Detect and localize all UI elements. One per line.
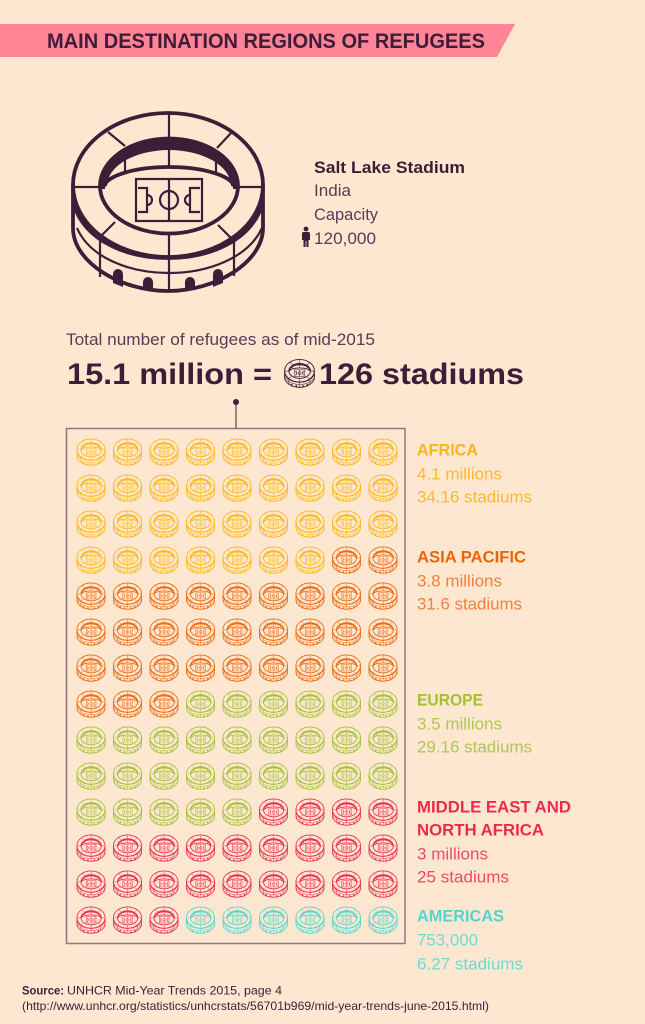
- icons: Europe: [77, 691, 397, 825]
- total headline: [67, 358, 524, 391]
- pictogram: 126 stadiums by region: [77, 439, 397, 933]
- source note: (http://www.unhcr.org/statistics/unhcrstats/56701b969/mid-year-trends-june-2015.html): [22, 999, 489, 1013]
- legend: Middle East and North Africa: [417, 798, 571, 886]
- icons: Americas: [186, 907, 397, 933]
- legend: Middle East and North Africa: MIDDLE EAST AND: [417, 798, 571, 816]
- legend: Middle East and North Africa: 3 millions: [417, 846, 488, 864]
- source note: UNHCR Mid-Year Trends 2015, page 4: [67, 984, 282, 998]
- legend: Europe: [417, 692, 532, 756]
- total headline: 126 stadiums: [319, 358, 524, 391]
- legend: Africa: 4.1 millions: [417, 466, 502, 484]
- stadium details: 120,000: [314, 230, 376, 248]
- legend: Africa: [417, 442, 532, 506]
- icons: Africa: [77, 439, 397, 573]
- legend: Europe: EUROPE: [417, 692, 483, 710]
- legend: Asia Pacific: 31.6 stadiums: [417, 596, 522, 614]
- icon: Salt Lake Stadium: [73, 113, 263, 291]
- stadium details: Capacity: [314, 206, 379, 224]
- source note: Source:: [22, 984, 64, 998]
- legend: Americas: 6.27 stadiums: [417, 956, 523, 974]
- legend: Asia Pacific: [417, 548, 526, 614]
- legend: Americas: AMERICAS: [417, 908, 504, 926]
- icons: Middle East and North Africa: [77, 799, 397, 933]
- legend: Asia Pacific: 3.8 millions: [417, 572, 502, 590]
- stadium details: Salt Lake Stadium: [314, 159, 465, 177]
- legend: Americas: 753,000: [417, 932, 478, 950]
- legend: Middle East and North Africa: 25 stadiums: [417, 868, 509, 886]
- icon: person: [302, 227, 310, 247]
- legend: Middle East and North Africa: NORTH AFRICA: [417, 822, 544, 840]
- icons: Asia Pacific: [77, 547, 397, 717]
- title banner: [0, 24, 515, 57]
- legend: Americas: [417, 908, 523, 974]
- total refugees caption: Total number of refugees as of mid-2015: [66, 331, 375, 349]
- legend: Africa: 34.16 stadiums: [417, 488, 532, 506]
- legend: Europe: 29.16 stadiums: [417, 738, 532, 756]
- legend: Asia Pacific: ASIA PACIFIC: [417, 548, 526, 566]
- source note: [22, 984, 489, 1013]
- total headline: 15.1 million =: [67, 358, 272, 391]
- legend: Africa: AFRICA: [417, 442, 478, 460]
- title banner: MAIN DESTINATION REGIONS OF REFUGEES: [47, 30, 485, 53]
- stadium details: India: [314, 182, 352, 200]
- stadium grid frame: [66, 428, 405, 944]
- connector pin: [233, 399, 239, 428]
- icon: small stadium: [285, 359, 314, 387]
- legend: Europe: 3.5 millions: [417, 716, 502, 734]
- stadium details: [302, 159, 465, 248]
